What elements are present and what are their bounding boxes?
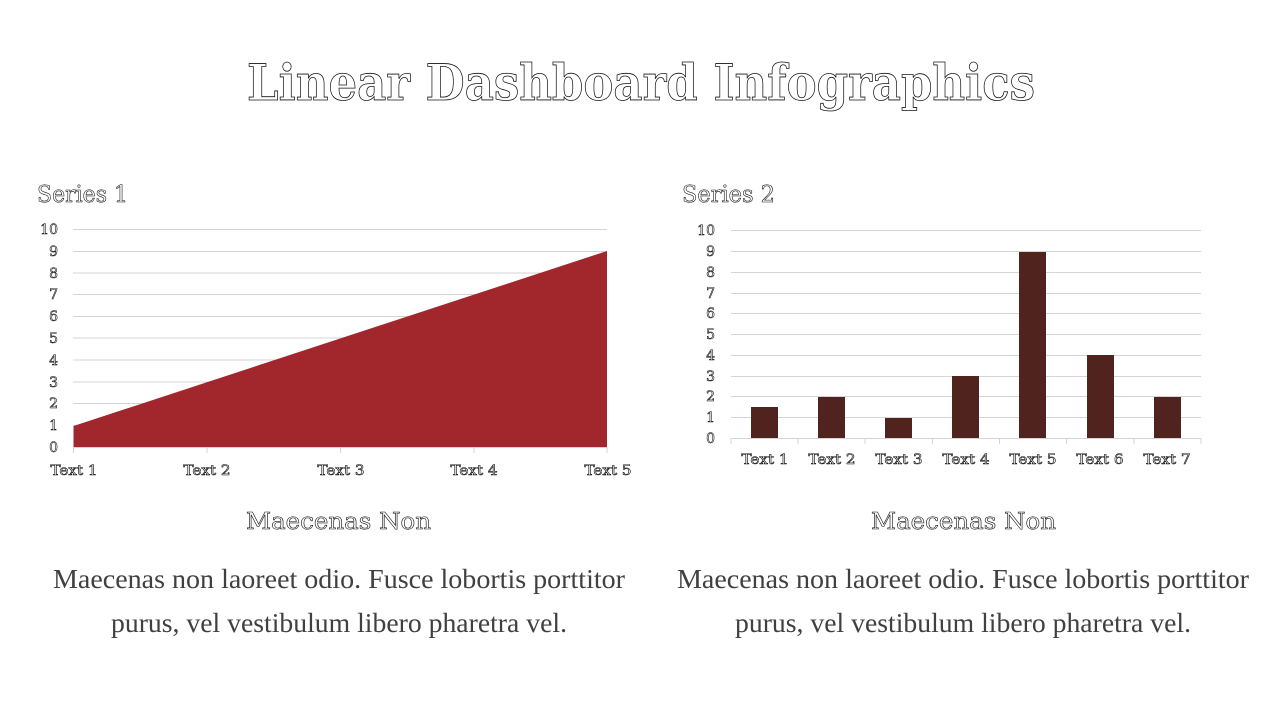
x axis labels: Text 4 [450, 463, 498, 479]
y axis labels: 8 [706, 265, 715, 281]
subheading: left: Maecenas Non [246, 509, 431, 535]
y axis labels: 2 [706, 389, 715, 405]
y axis labels: 2 [49, 396, 58, 412]
y axis labels: 10 [40, 222, 58, 238]
y axis labels: 4 [706, 348, 715, 364]
text block: right: purus, vel vestibulum libero pharetra vel. [735, 608, 1191, 638]
x axis labels: Text 3 [318, 463, 364, 479]
y axis labels: 0 [706, 431, 715, 447]
x axis labels [742, 452, 1190, 468]
text block: left: Maecenas non laoreet odio. Fusce lobortis porttitor [53, 564, 625, 594]
x axis labels: Text 1 [742, 452, 788, 468]
y axis labels: 3 [706, 369, 715, 385]
y axis labels: 7 [49, 287, 58, 303]
y axis labels: 5 [49, 331, 58, 347]
y axis labels: 9 [49, 244, 58, 260]
x axis labels: Text 5 [1010, 452, 1056, 468]
x axis labels: Text 5 [584, 463, 632, 479]
text block: left: purus, vel vestibulum libero pharetra vel. [111, 608, 567, 638]
heading: series 1: Series 1 [37, 182, 128, 208]
y axis labels [697, 223, 715, 447]
y axis labels: 8 [49, 266, 58, 282]
y axis labels: 5 [706, 327, 715, 343]
title: Linear Dashboard Infographics [247, 53, 1035, 112]
y axis labels: 7 [706, 286, 715, 302]
y axis labels: 10 [697, 223, 715, 239]
x axis labels: Text 3 [876, 452, 922, 468]
panel: series 1 area chart [37, 182, 632, 479]
y axis labels: 3 [49, 375, 58, 391]
y axis labels: 1 [49, 418, 58, 434]
panel: series 2 bar chart [682, 182, 1201, 468]
text block: right [677, 564, 1249, 638]
x axis labels: Text 6 [1076, 452, 1124, 468]
x axis labels: Text 4 [942, 452, 990, 468]
heading: series 2: Series 2 [682, 182, 775, 208]
y axis labels: 9 [706, 244, 715, 260]
y axis labels: 4 [49, 353, 58, 369]
area series [74, 251, 607, 447]
x axis labels: Text 1 [50, 463, 98, 479]
y axis labels: 6 [706, 306, 715, 322]
subheading: right: Maecenas Non [871, 509, 1056, 535]
y axis labels [40, 222, 58, 456]
x axis labels [50, 463, 632, 479]
y axis labels: 1 [706, 410, 715, 426]
text block: left [53, 564, 625, 638]
x axis labels: Text 7 [1144, 452, 1190, 468]
x axis labels: Text 2 [808, 452, 856, 468]
x axis labels: Text 2 [184, 463, 230, 479]
y axis labels: 6 [49, 309, 58, 325]
bars [751, 252, 1181, 438]
text block: right: Maecenas non laoreet odio. Fusce lobortis porttitor [677, 564, 1249, 594]
y axis labels: 0 [49, 440, 58, 456]
